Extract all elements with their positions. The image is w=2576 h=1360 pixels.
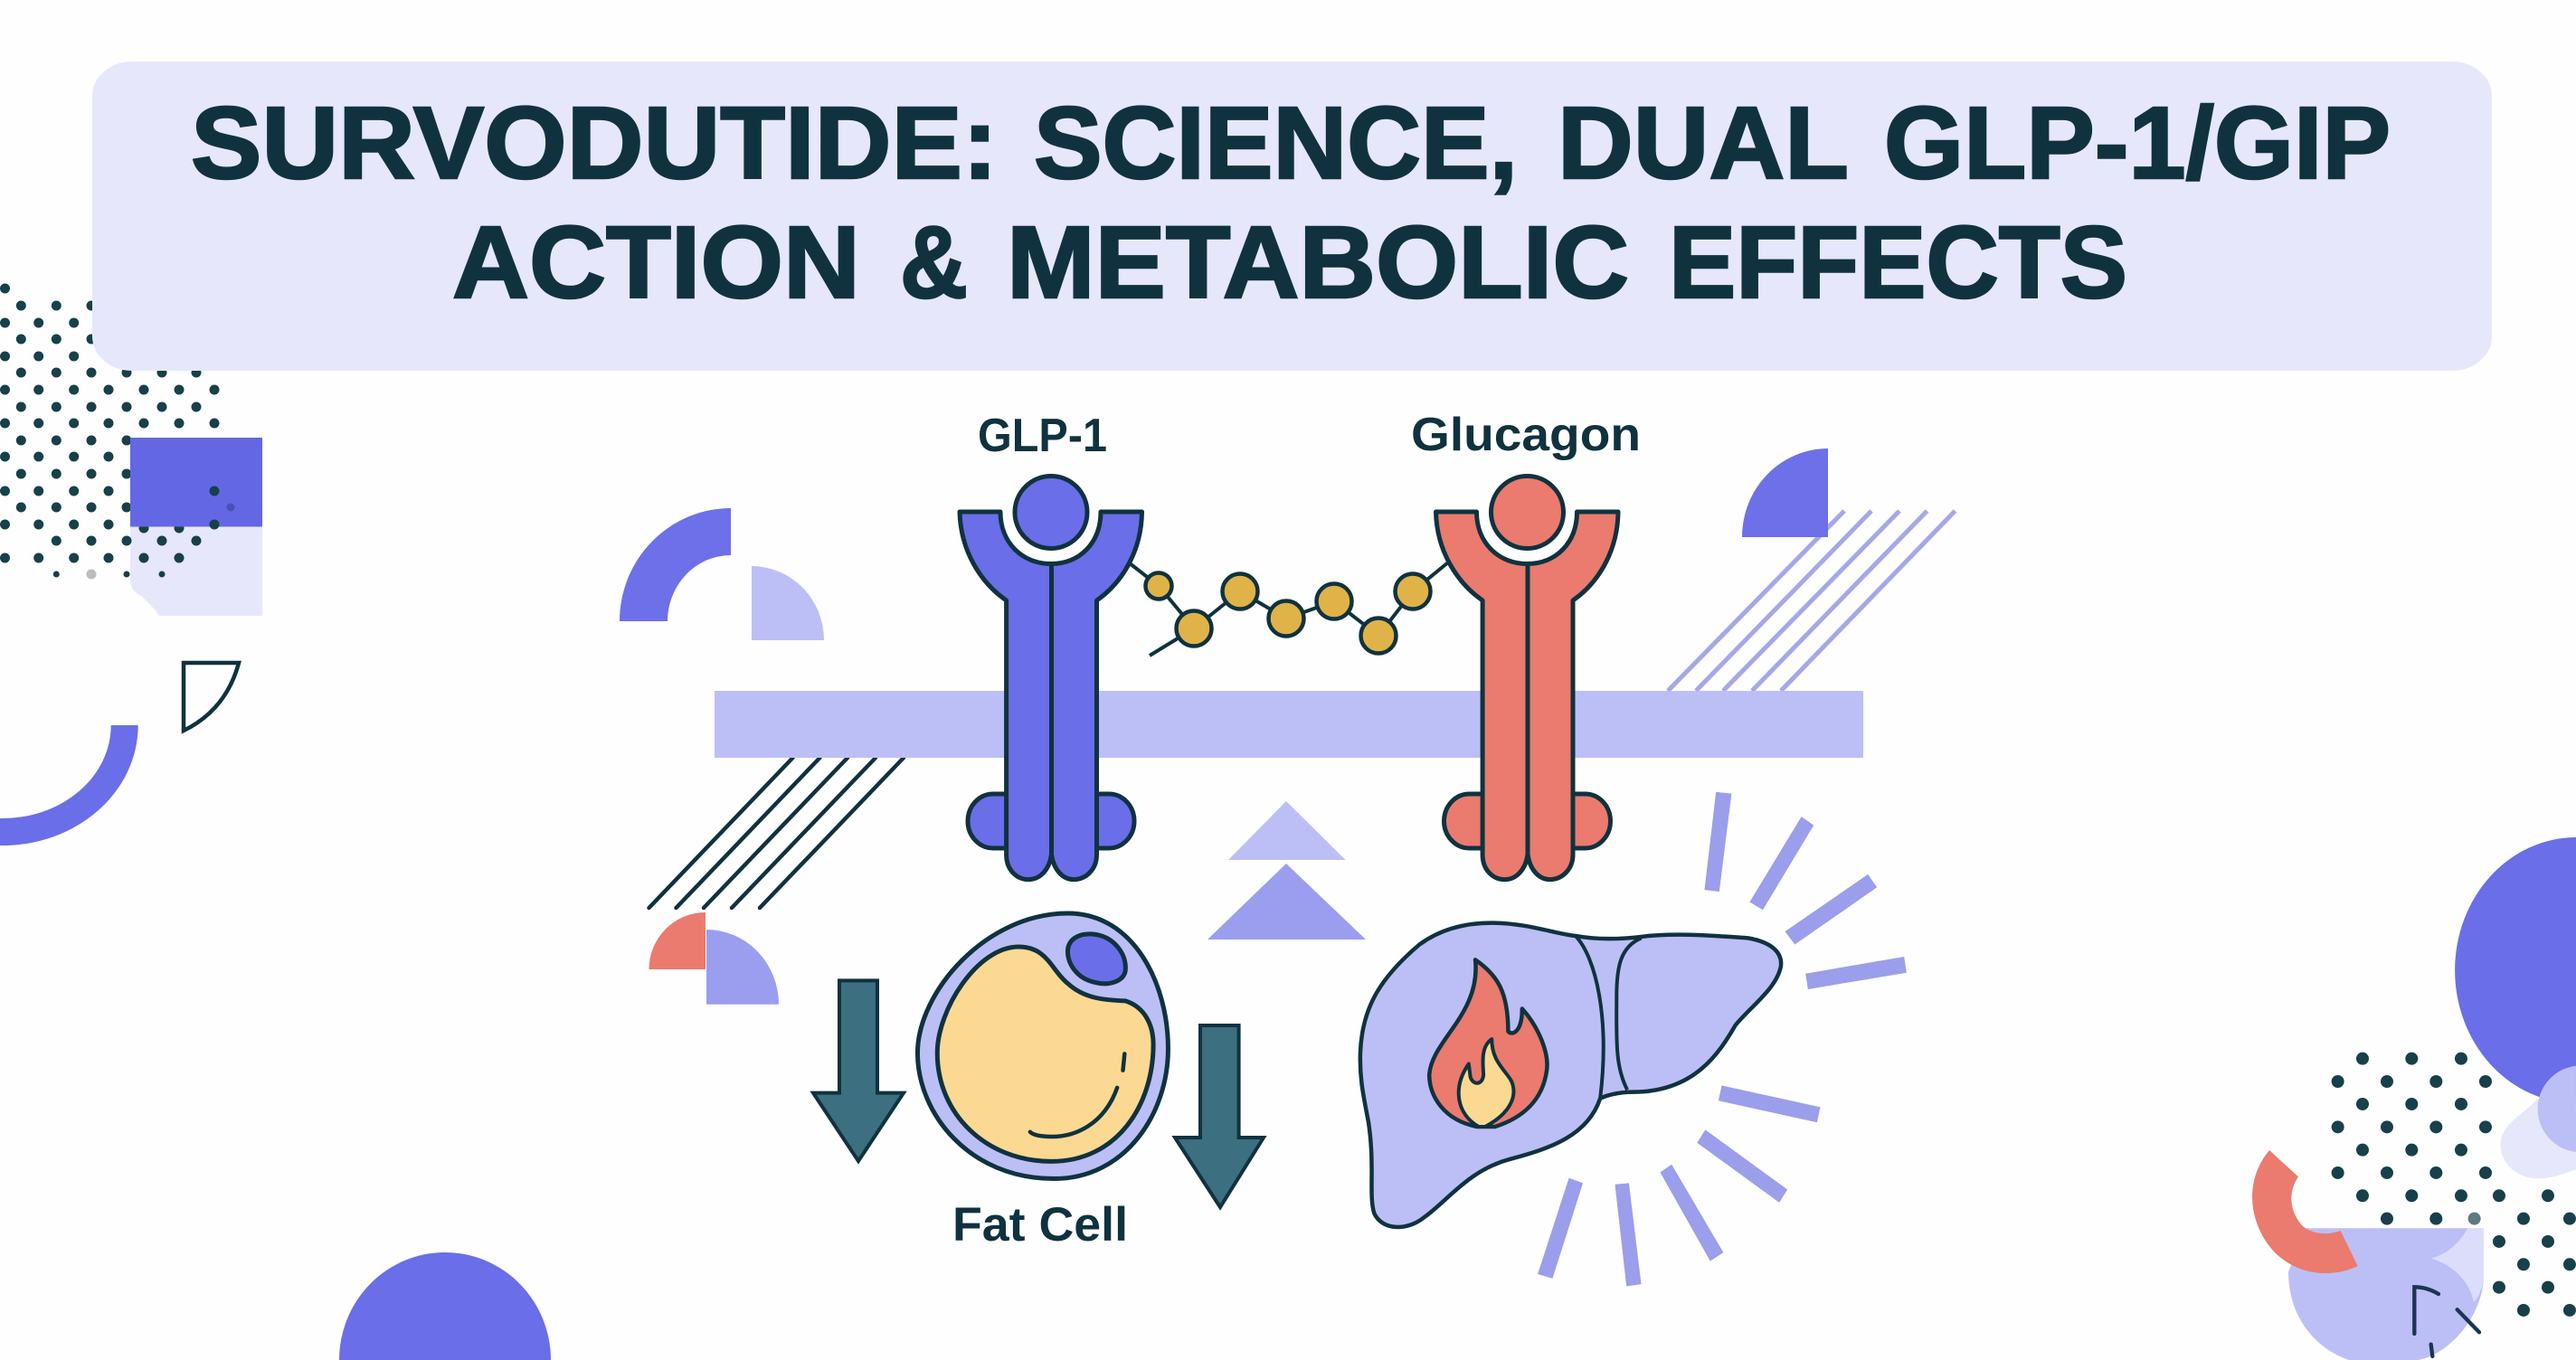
decoration: dark tick lines [2414,1287,2479,1356]
title line 2 [452,205,2127,319]
cell membrane [715,691,1863,758]
arrow: fat cell left down [813,980,904,1161]
decoration: right large purple circle [2455,837,2576,1103]
decoration: outlined quarter shape [184,663,239,731]
title line 1: SCIENCE, [1034,86,1518,200]
triangle: medium up [1208,864,1366,940]
title line 1: DUAL [1558,86,1849,200]
decoration: left square block [130,526,262,616]
decoration: right pale and light blobs [2501,1066,2576,1178]
triangle: light up [1228,801,1346,860]
decoration: lower-left purple arc [0,725,138,845]
icon: flame inner [1459,1039,1513,1127]
title line 2: METABOLIC [1007,205,1629,319]
title line 2: ACTION [452,205,860,319]
liver energy rays [1538,792,1907,1286]
decoration: lower-left dark hatch lines [649,758,904,908]
title line 1 [191,86,2391,200]
label: Glucagon: Glucagon [1411,409,1641,461]
icon: flame outer [1429,959,1547,1127]
decoration: upper-right hatch lines [1668,511,1956,691]
decoration: purple quarter [706,930,779,1005]
label: GLP-1: GLP-1 [978,410,1107,462]
label: Fat Cell: Fat Cell [952,1198,1128,1251]
title line 2: & [900,205,968,319]
icon: fat cell [917,913,1168,1179]
decoration: purple quarter ring [620,508,731,621]
receptor: Glucagon [1436,476,1618,880]
title line 2: EFFECTS [1669,205,2127,319]
decoration: upper-right purple quarter [1742,449,1828,537]
decoration: right dot pattern [2332,1053,2576,1317]
arrow: fat cell right down [1175,1025,1264,1207]
peptide chain [1130,562,1448,656]
decoration: left dot pattern [0,284,219,579]
decoration: light quarter circle [752,566,824,640]
title panel [92,61,2492,371]
icon: liver with flame [1360,923,1781,1227]
title line 1: SURVODUTIDE: [191,86,998,200]
title line 1: GLP-1/GIP [1884,86,2391,200]
decoration: lower-right half circle [2288,1228,2484,1360]
decoration: coral ring segment [2252,1150,2358,1273]
decoration: left purple square [130,438,262,530]
decoration: bottom-left purple circle [339,1252,551,1360]
receptor: GLP-1 [960,476,1141,880]
decoration: coral quarter [649,912,706,969]
